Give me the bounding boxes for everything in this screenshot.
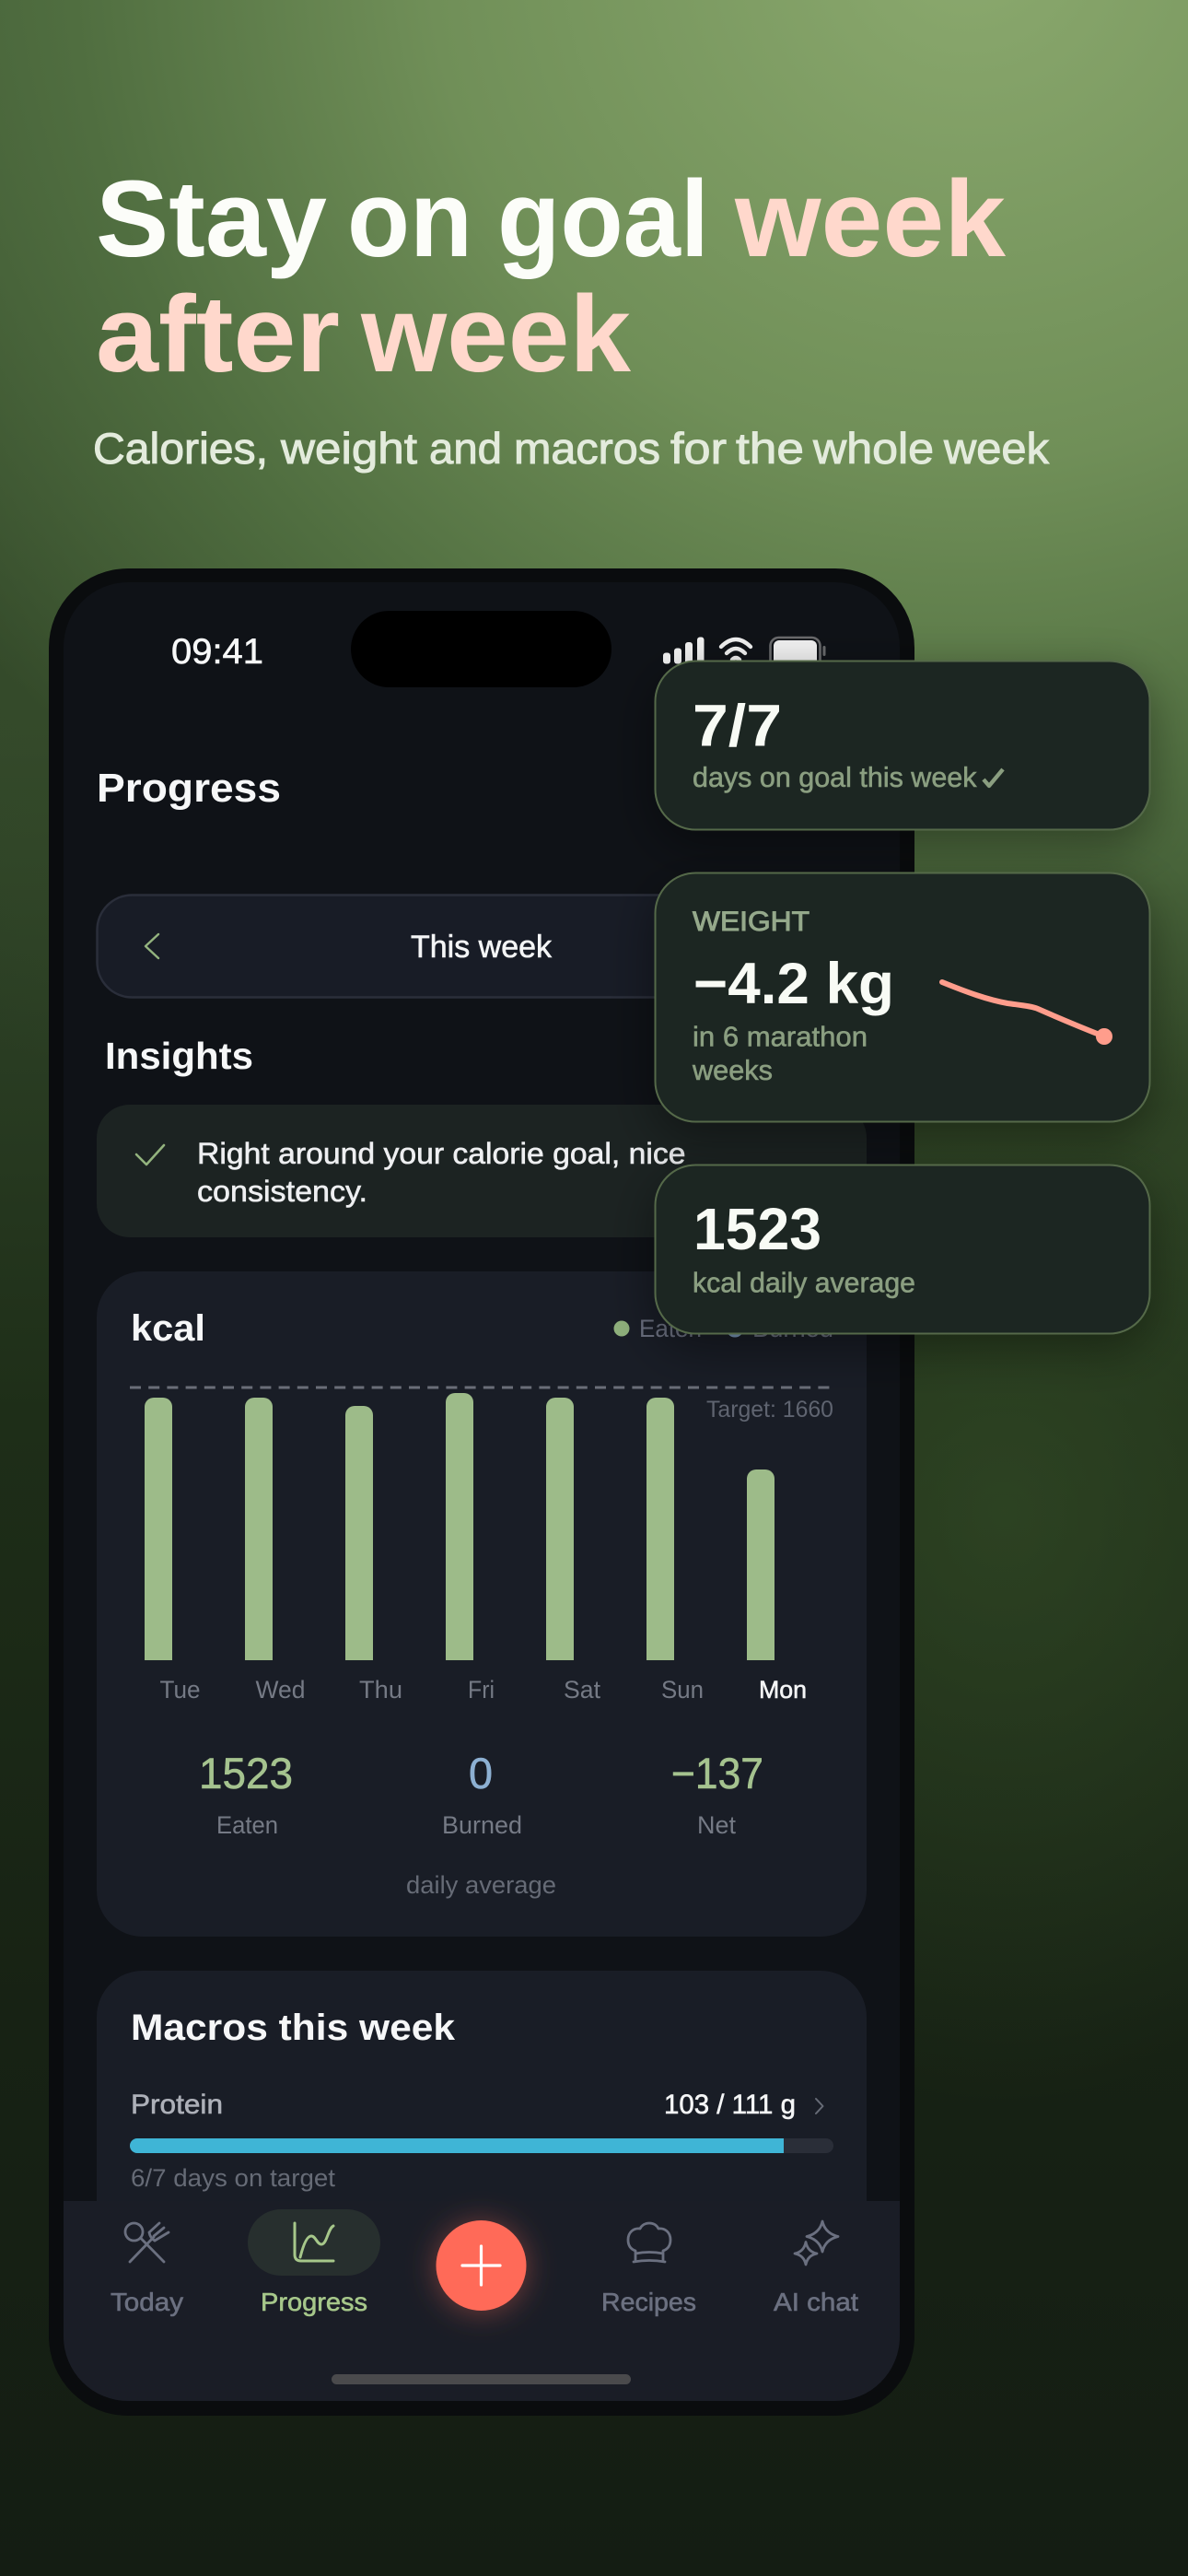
status time: 09:41 <box>171 632 263 672</box>
tab: today <box>111 2223 183 2316</box>
daily average caption: daily average <box>406 1871 556 1899</box>
insights heading: Insights <box>105 1035 253 1077</box>
week selector <box>98 896 866 997</box>
chart legend: Burned <box>752 1315 833 1342</box>
insight card <box>97 1105 867 1237</box>
stat card: weight <box>656 873 1149 1122</box>
title: goal <box>497 158 709 280</box>
macros card <box>97 1971 867 2201</box>
stat card: days on goal: 7/7 <box>693 693 782 759</box>
target label: Target: 1660 <box>706 1397 833 1423</box>
dynamic island <box>351 611 611 687</box>
stat card: daily average: 1523 <box>693 1196 821 1262</box>
stat card: weight: −4.2 kg <box>693 952 894 1016</box>
stat: eaten <box>202 1758 291 1833</box>
chart legend: Eaten <box>639 1315 702 1342</box>
bar chart <box>145 1393 775 1660</box>
stat card: days on goal <box>656 662 1149 829</box>
stat: burned: 0 <box>469 1749 493 1797</box>
icon: fork and spoon <box>125 2223 169 2262</box>
home indicator <box>332 2374 631 2384</box>
icon: check <box>136 1145 164 1165</box>
insight card: Right around your calorie goal, nice <box>197 1137 685 1170</box>
stat card: daily average <box>656 1165 1149 1334</box>
target line <box>130 1386 835 1389</box>
protein label: Protein <box>131 2090 223 2120</box>
day labels: Tue <box>160 1676 201 1704</box>
page heading: Progress <box>97 766 281 811</box>
tab: ai chat: AI chat <box>774 2288 858 2316</box>
day labels: Sat <box>564 1676 600 1704</box>
title: after <box>96 274 340 395</box>
phone screen <box>64 582 900 2401</box>
stat card: weight: WEIGHT <box>693 907 809 937</box>
protein progress bar <box>130 2138 833 2153</box>
day labels: Mon <box>759 1676 807 1704</box>
stat card: daily average: kcal daily average <box>693 1266 915 1299</box>
stat: net: −137 <box>671 1749 763 1797</box>
status icons <box>663 638 825 669</box>
icon: chart <box>295 2223 333 2261</box>
tab: recipes: Recipes <box>601 2288 696 2316</box>
stat card: weight: weeks <box>692 1054 773 1086</box>
tab bar <box>64 2201 900 2401</box>
insight card: consistency. <box>197 1175 367 1208</box>
subtitle: the <box>736 424 804 473</box>
protein value: 103 / 111 g <box>664 2090 796 2120</box>
macros heading: Macros this week <box>131 2008 456 2048</box>
kcal chart card <box>97 1271 867 1937</box>
phone mockup <box>49 568 914 2416</box>
icon: sparkles <box>795 2221 838 2265</box>
subtitle: weight <box>280 424 417 473</box>
sparkline <box>942 982 1112 1045</box>
chevron <box>816 2099 823 2113</box>
tab: recipes <box>601 2223 696 2316</box>
subtitle: and <box>429 424 502 473</box>
chart legend <box>613 1319 833 1338</box>
day labels: Fri <box>468 1676 495 1704</box>
stat: eaten: Eaten <box>216 1811 278 1839</box>
subtitle: Calories, <box>93 424 268 473</box>
subtitle: macros <box>514 424 660 473</box>
kcal heading: kcal <box>131 1308 205 1349</box>
stat card: days on goal: days on goal this week <box>693 761 977 793</box>
title: week <box>734 158 1006 280</box>
day labels: Sun <box>661 1676 704 1704</box>
day labels: Wed <box>256 1676 306 1704</box>
icon: chef hat <box>628 2223 670 2262</box>
day labels <box>160 1680 806 1699</box>
subtitle: week <box>943 424 1050 473</box>
title <box>96 158 1006 395</box>
title: Stay <box>96 158 327 280</box>
stat card: weight: in 6 marathon <box>693 1021 868 1052</box>
week selector: This week <box>411 930 553 965</box>
stat: eaten: 1523 <box>199 1749 293 1797</box>
stat: net: Net <box>697 1811 736 1839</box>
stat: net <box>672 1758 762 1833</box>
stat: burned <box>444 1758 521 1833</box>
days on target: 6/7 days on target <box>131 2164 336 2192</box>
phone frame <box>49 568 914 2416</box>
chevron left <box>146 934 158 958</box>
subtitle: whole <box>812 424 934 473</box>
title: on <box>347 158 472 280</box>
day labels: Thu <box>359 1676 402 1704</box>
tab: progress: Progress <box>261 2288 367 2316</box>
stat: burned: Burned <box>442 1811 522 1839</box>
subtitle <box>93 424 1050 473</box>
tab: today: Today <box>111 2288 183 2316</box>
title: week <box>360 274 631 395</box>
add button <box>437 2220 527 2311</box>
tab: progress <box>248 2209 380 2316</box>
subtitle: for <box>670 424 727 473</box>
icon: check mark <box>984 769 1003 786</box>
tab: ai chat <box>774 2221 858 2316</box>
